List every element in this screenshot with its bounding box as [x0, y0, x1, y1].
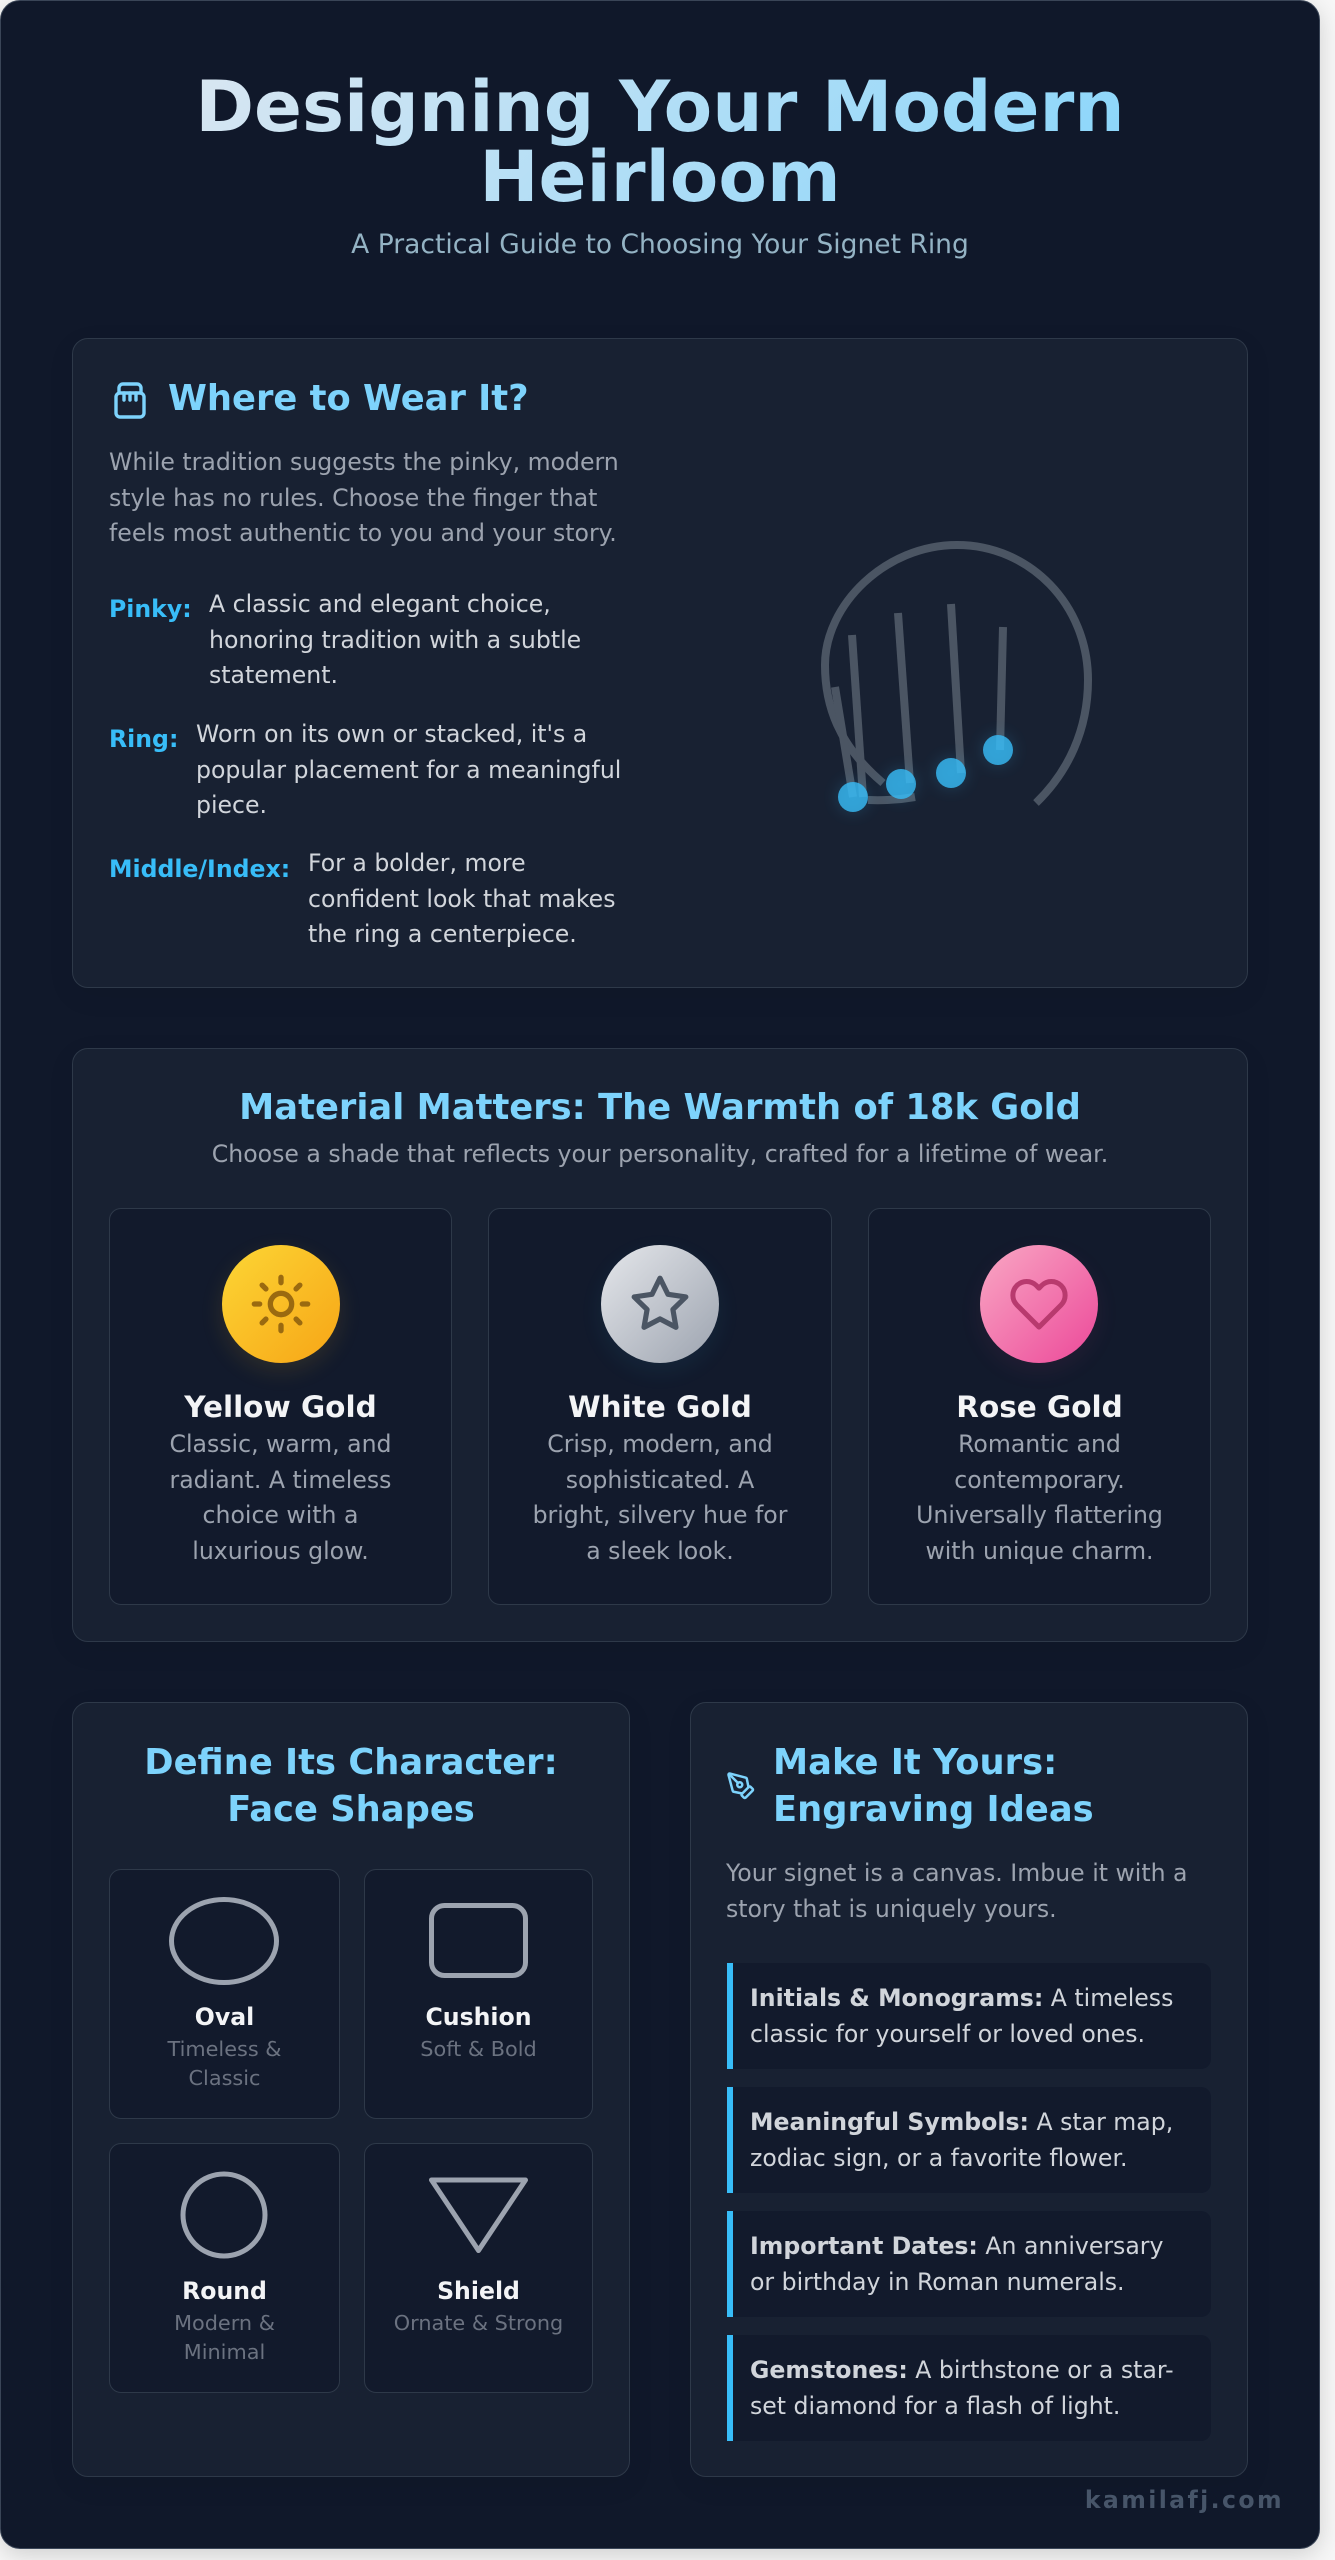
heading: where to wear it: Where to Wear It? [168, 378, 529, 419]
card: white gold [488, 1208, 832, 1605]
note: round: Modern & [174, 2311, 275, 2335]
note: round: Minimal [184, 2340, 265, 2364]
name: white gold: White Gold [568, 1390, 752, 1424]
heading: face shapes: Define Its Character: [144, 1742, 558, 1783]
card: rose gold [868, 1208, 1211, 1605]
finger text: pinky: statement. [209, 661, 338, 689]
card: shield [364, 2143, 593, 2393]
idea: important dates: Important Dates: An anniversary [750, 2232, 1163, 2260]
finger label: pinky: Pinky: [109, 595, 192, 623]
heading: engraving ideas: Engraving Ideas [773, 1789, 1094, 1830]
description: rose gold: contemporary. [954, 1466, 1125, 1494]
idea: gemstones [727, 2335, 1211, 2441]
icon: hand [114, 382, 146, 419]
heading: engraving ideas: Make It Yours: [773, 1742, 1057, 1783]
material subtitle: Choose a shade that reflects your personality, crafted for a lifetime of wear. [212, 1140, 1108, 1168]
description: white gold: a sleek look. [586, 1537, 734, 1565]
footer watermark: kamilafj.com [1085, 2486, 1284, 2514]
finger text: middle/index [308, 849, 616, 948]
description: white gold [533, 1430, 788, 1565]
description: white gold: sophisticated. A [566, 1466, 754, 1494]
name: shield: Shield [437, 2277, 520, 2305]
note: oval: Timeless & [168, 2037, 281, 2061]
subtitle: A Practical Guide to Choosing Your Signet Ring [351, 229, 969, 260]
finger text: middle/index: the ring a centerpiece. [308, 920, 577, 948]
finger text: pinky: A classic and elegant choice, [209, 590, 551, 618]
finger label: ring: Ring: [109, 725, 178, 753]
shape: cushion [429, 1903, 528, 1978]
panel: face shapes [72, 1702, 630, 2477]
heading: face shapes [144, 1742, 558, 1830]
heading: material matters: Material Matters: The Warmth of 18k Gold [239, 1087, 1081, 1128]
idea: important dates [727, 2211, 1211, 2317]
finger text: pinky [209, 590, 581, 689]
card: round [109, 2143, 340, 2393]
intro paragraph [109, 448, 619, 547]
finger text: middle/index: For a bolder, more [308, 849, 526, 877]
description: rose gold: Romantic and [958, 1430, 1121, 1458]
finger label: middle/index: Middle/Index: [109, 855, 290, 883]
idea: meaningful symbols: Meaningful Symbols: A star map, [750, 2108, 1173, 2136]
icon: pen tool [727, 1772, 754, 1800]
name: yellow gold: Yellow Gold [184, 1390, 377, 1424]
finger text: ring: piece. [196, 791, 267, 819]
title [72, 72, 1248, 212]
panel: material matters [72, 1048, 1248, 1642]
title: Designing Your Modern [195, 65, 1125, 148]
name: round: Round [182, 2277, 267, 2305]
idea: gemstones: Gemstones: A birthstone or a star- [750, 2356, 1174, 2384]
note: oval: Classic [189, 2066, 260, 2090]
shape: oval [169, 1897, 279, 1985]
card: yellow gold [109, 1208, 452, 1605]
description: white gold: bright, silvery hue for [533, 1501, 787, 1529]
description: yellow gold: choice with a [203, 1501, 358, 1529]
idea: initials and monograms: Initials & Monograms: A timeless [750, 1984, 1173, 2012]
engraving intro [726, 1859, 1188, 1923]
icon: white gold star [601, 1245, 719, 1363]
finger text: pinky: honoring tradition with a subtle [209, 626, 581, 654]
idea: important dates: or birthday in Roman numerals. [750, 2268, 1125, 2296]
card: cushion [364, 1869, 593, 2119]
illustration: hand with ring positions [821, 541, 1092, 816]
card: oval [109, 1869, 340, 2119]
intro paragraph: While tradition suggests the pinky, modern [109, 448, 619, 476]
intro paragraph: style has no rules. Choose the finger that [109, 484, 597, 512]
note: oval [167, 2037, 281, 2090]
heading: engraving ideas [773, 1742, 1094, 1830]
shape: round [180, 2172, 268, 2258]
finger text: ring: popular placement for a meaningful [196, 756, 621, 784]
name: oval: Oval [195, 2003, 254, 2031]
finger text: middle/index: confident look that makes [308, 885, 616, 913]
description: rose gold: Universally flattering [916, 1501, 1163, 1529]
description: yellow gold [169, 1430, 392, 1565]
engraving intro: story that is uniquely yours. [726, 1895, 1057, 1923]
panel: engraving ideas [690, 1702, 1248, 2477]
note: shield: Ornate & Strong [394, 2311, 563, 2335]
description: yellow gold: Classic, warm, and [169, 1430, 392, 1458]
icon: rose gold heart [980, 1245, 1098, 1363]
name: cushion: Cushion [425, 2003, 532, 2031]
idea: gemstones: set diamond for a flash of light. [750, 2392, 1120, 2420]
heading: face shapes: Face Shapes [227, 1789, 475, 1830]
idea: initials and monograms: classic for yourself or loved ones. [750, 2020, 1145, 2048]
description: white gold: Crisp, modern, and [547, 1430, 773, 1458]
finger text: ring [196, 720, 621, 819]
description: yellow gold: luxurious glow. [192, 1537, 369, 1565]
finger text: ring: Worn on its own or stacked, it's a [196, 720, 587, 748]
note: round [174, 2311, 275, 2364]
description: yellow gold: radiant. A timeless [170, 1466, 391, 1494]
name: rose gold: Rose Gold [956, 1390, 1123, 1424]
shape: shield [429, 2178, 528, 2253]
idea: initials and monograms [727, 1963, 1211, 2069]
title: Heirloom [479, 135, 841, 218]
idea: meaningful symbols: zodiac sign, or a favorite flower. [750, 2144, 1127, 2172]
engraving intro: Your signet is a canvas. Imbue it with a [726, 1859, 1188, 1887]
icon: yellow gold sun [222, 1245, 340, 1363]
idea: meaningful symbols [727, 2087, 1211, 2193]
note: cushion: Soft & Bold [420, 2037, 537, 2061]
intro paragraph: feels most authentic to you and your story. [109, 519, 617, 547]
panel: where to wear it [72, 338, 1248, 988]
description: rose gold: with unique charm. [925, 1537, 1154, 1565]
description: rose gold [916, 1430, 1163, 1565]
